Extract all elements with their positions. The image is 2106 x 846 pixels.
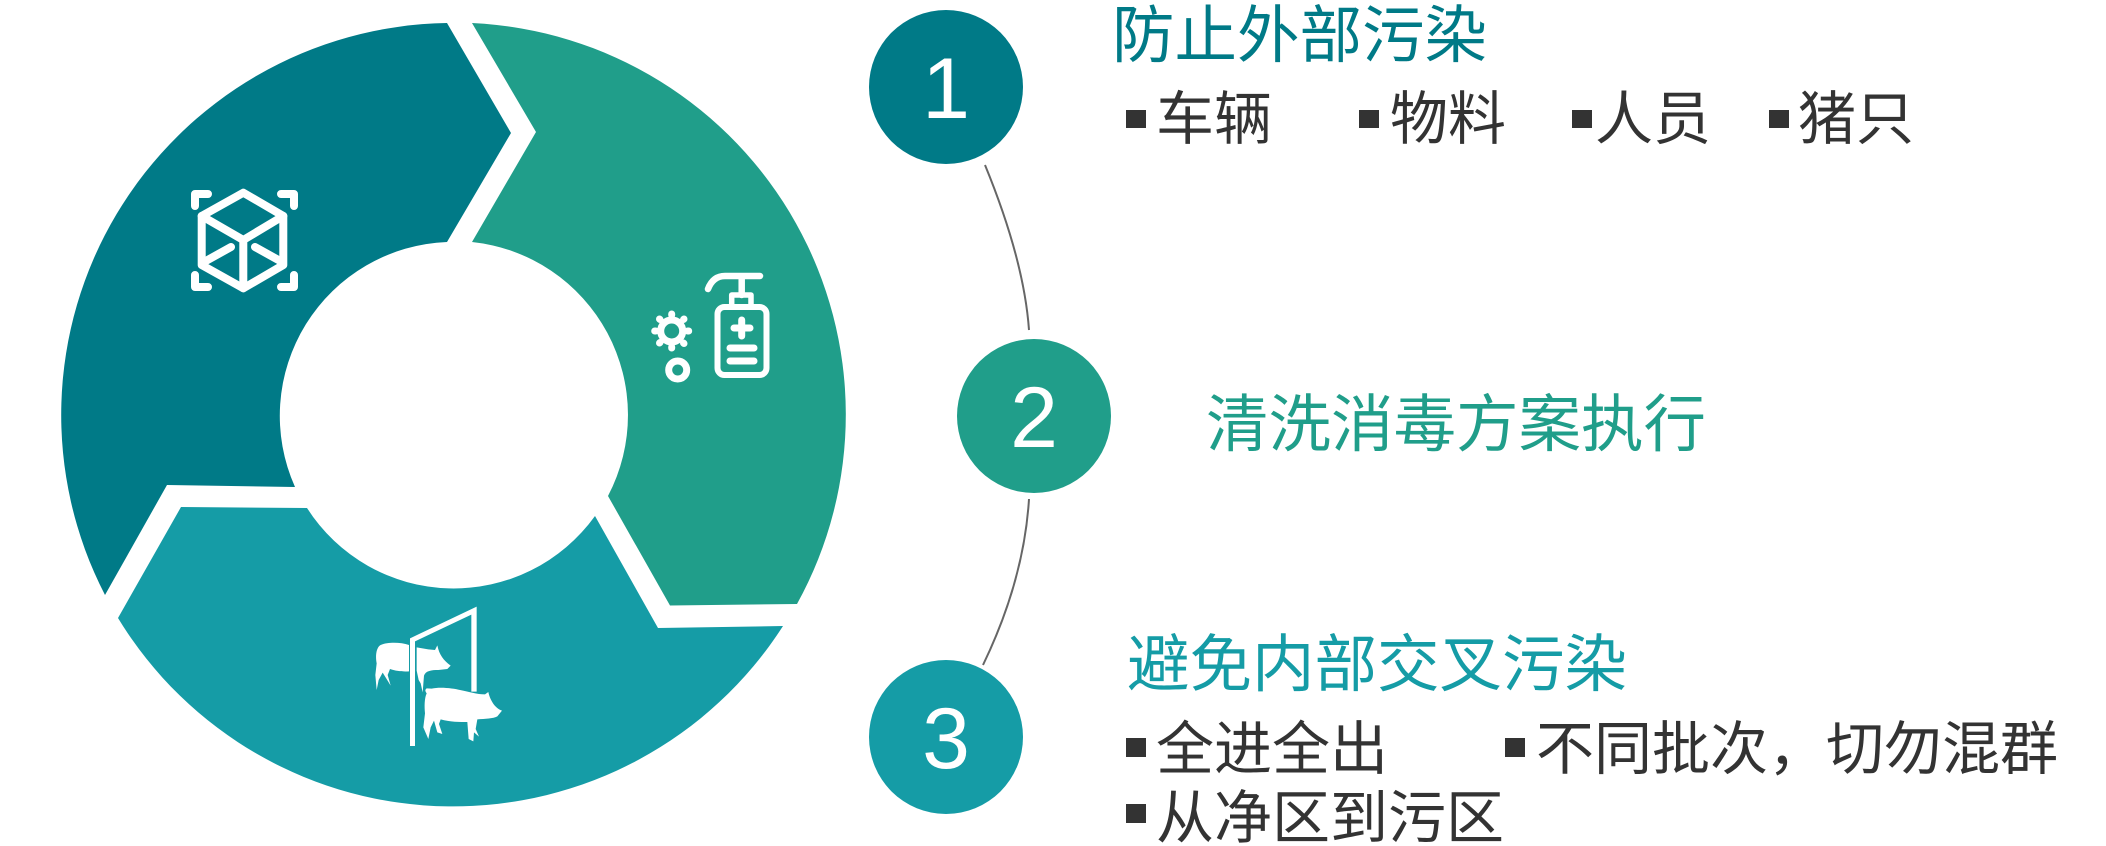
step 1 number (869, 10, 1023, 164)
list: external sources (1126, 87, 1914, 152)
step 3 number: 3 (922, 691, 970, 787)
step 3 number (869, 660, 1023, 814)
heading: avoid internal cross contamination: 避免内部交叉污染 (1127, 630, 1627, 700)
step 1 number: 1 (922, 41, 970, 137)
list: external sources: 车辆 (1156, 87, 1272, 152)
icon: cube (195, 193, 294, 288)
list: external sources: 物料 (1390, 87, 1506, 152)
icon: sanitizer bottle (655, 276, 766, 379)
step 2 number: 2 (1010, 370, 1058, 466)
list: internal measures (1126, 717, 2058, 846)
cycle ring (61, 23, 846, 806)
heading: prevent external contamination: 防止外部污染 (1112, 1, 1487, 71)
connector lines (983, 165, 1029, 665)
segment: internal cross contamination (118, 507, 783, 806)
segment: external contamination (61, 23, 511, 595)
heading: cleaning plan execution: 清洗消毒方案执行 (1206, 390, 1706, 460)
list: external sources: 人员 (1595, 87, 1711, 152)
list: internal measures: 全进全出 (1156, 717, 1388, 782)
segment: cleaning and disinfection (472, 23, 846, 606)
step 2 number (957, 339, 1111, 493)
list: internal measures: 不同批次，切勿混群 (1536, 717, 2058, 782)
icon: pigs and door (375, 607, 502, 746)
list: external sources: 猪只 (1798, 87, 1914, 152)
